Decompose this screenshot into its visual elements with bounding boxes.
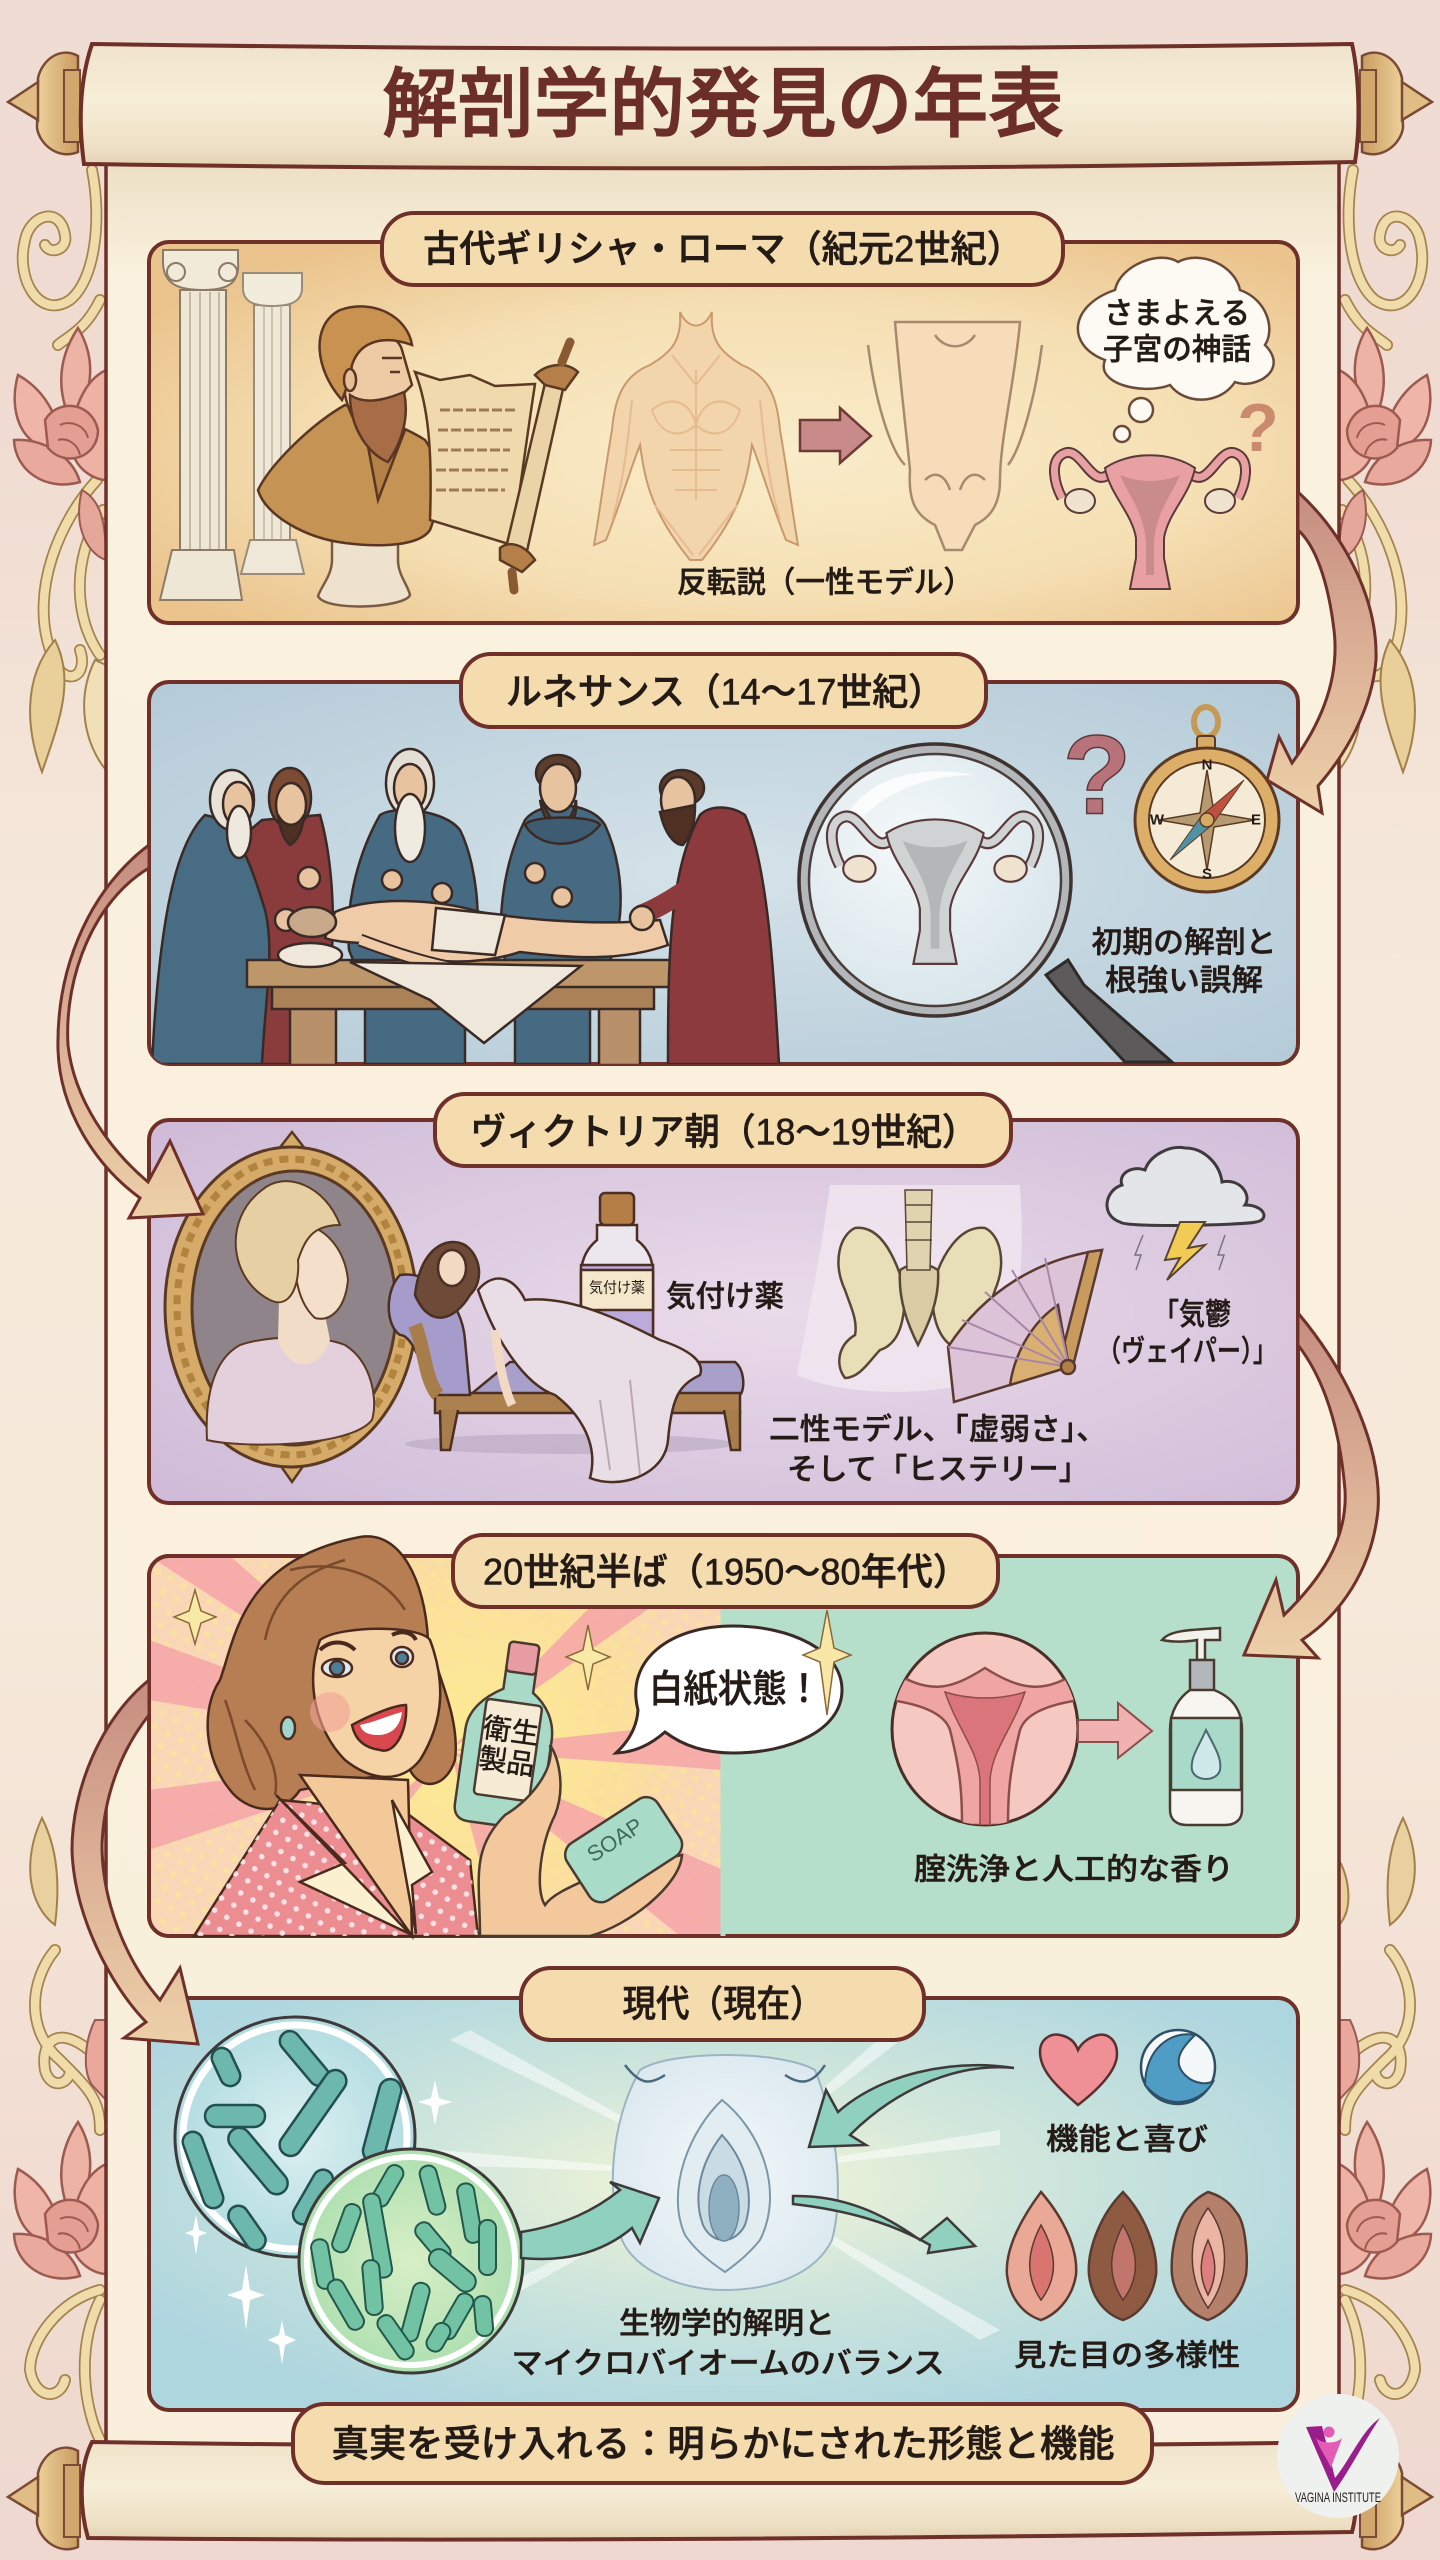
panel: Renaissance <box>149 682 1298 1065</box>
icon: uterus cross-section circle <box>890 1633 1080 1825</box>
text: vapours <box>1097 1298 1277 1368</box>
icon: soap bar with hand: SOAP <box>582 1813 647 1867</box>
figure: centre blue robe scholar <box>348 749 478 1064</box>
icon: pink uterus <box>1054 452 1246 589</box>
panel: mid twentieth century <box>149 1536 1298 1936</box>
text: biological elucidation: マイクロバイオームのバランス <box>512 2348 944 2380</box>
pill heading: Renaissance: ルネサンス（14～17世紀） <box>506 672 944 712</box>
glow rays <box>440 2020 1000 2340</box>
callout: blank slate speech bubble <box>616 1626 842 1753</box>
text: wandering womb myth: 子宮の神話 <box>1103 334 1251 366</box>
text: two-sex model <box>769 1414 1107 1486</box>
text: bottle label: 気付け薬 <box>589 1280 645 1296</box>
arrow: transformation <box>800 408 871 463</box>
text: two-sex model: 二性モデル、「虚弱さ」、 <box>769 1414 1107 1446</box>
panel: modern day <box>149 1998 1298 2410</box>
text: early dissection: 根強い誤解 <box>1105 964 1263 998</box>
icon: parchment and scroll rod <box>415 342 578 590</box>
bottom scroll roller <box>8 2442 1432 2549</box>
text: diversity of appearance: 見た目の多様性 <box>1014 2340 1240 2372</box>
right lower floral ornament <box>1339 1818 1431 2440</box>
icon: bust pedestal <box>318 540 410 606</box>
top scroll roller <box>8 44 1432 168</box>
icon: pump bottle <box>1162 1628 1242 1825</box>
callout: wandering womb thought bubble <box>1078 258 1274 442</box>
pop art ray background <box>149 1556 723 1936</box>
logo: Vagina Institute: VAGINA INSTITUTE <box>1295 2489 1381 2505</box>
text: early dissection <box>1092 926 1276 998</box>
text: early dissection: 初期の解剖と <box>1092 926 1276 960</box>
icon: compass: W <box>1150 812 1165 828</box>
pill heading: modern day: 現代（現在） <box>622 1984 824 2024</box>
panel: ancient Greece and Rome <box>149 242 1298 623</box>
icon: sparkle <box>566 1625 610 1690</box>
icon: compass: N <box>1202 756 1212 774</box>
left lower floral ornament <box>14 1818 106 2440</box>
arrow: anatomy to diversity <box>793 2196 975 2253</box>
figure: red robe anatomist <box>630 770 779 1064</box>
text: one-sex model: 反転説（一性モデル） <box>677 566 973 600</box>
pill heading: Victorian <box>435 1094 1011 1166</box>
text: douching and artificial scent: 腟洗浄と人工的な香り <box>914 1854 1234 1886</box>
icon: soap bar with hand <box>479 1745 687 1936</box>
pill: conclusion <box>293 2404 1152 2483</box>
arrow: function into anatomy <box>809 2065 1014 2147</box>
arrow: ancient to Renaissance <box>1267 492 1376 813</box>
icon: green petri circle with bacteria <box>299 2149 523 2373</box>
parchment scroll body <box>106 160 1339 2460</box>
icon: question mark: ? <box>1063 712 1131 838</box>
icon: hygiene product bottle <box>453 1637 565 1831</box>
icon: folding fan <box>948 1250 1102 1402</box>
text: smelling salts: 気付け薬 <box>666 1280 784 1314</box>
text: wandering womb myth: さまよえる <box>1104 298 1250 330</box>
text: hygiene product label <box>477 1712 541 1781</box>
icon: question mark: ? <box>1237 390 1279 466</box>
arrow: Victorian to mid century <box>1244 1313 1378 1658</box>
logo: Vagina Institute <box>1277 2394 1399 2518</box>
figure: right blue robe scholar <box>501 755 621 1064</box>
text: vapours: 「気鬱 <box>1153 1298 1231 1332</box>
icon: sparkles <box>185 2080 452 2365</box>
figure: red robe scholar behind <box>238 768 333 1064</box>
icon: compass <box>1135 707 1279 892</box>
text: hygiene product label: 製品 <box>477 1743 537 1781</box>
arrow: mid century to modern <box>72 1680 198 2044</box>
table <box>247 960 687 1065</box>
figure: left blue robe scholar <box>152 770 297 1064</box>
callout: blank slate speech bubble: 白紙状態！ <box>649 1669 821 1711</box>
icon: short column <box>241 273 304 574</box>
icon: diversity shapes <box>1007 2192 1247 2320</box>
right upper floral ornament <box>1339 170 1431 772</box>
icon: scholar bust <box>258 306 438 545</box>
text: vapours: （ヴェイパー）」 <box>1097 1336 1277 1368</box>
icon: translucent anatomy <box>613 2055 838 2290</box>
pill heading: mid twentieth century: 20世紀半ば（1950～80年代） <box>483 1552 969 1592</box>
sheet <box>350 962 581 1043</box>
figure: dissected body <box>278 901 668 972</box>
pill heading: Victorian: ヴィクトリア朝（18～19世紀） <box>470 1112 978 1152</box>
icon: sparkle <box>174 1590 216 1644</box>
figure: reclining woman <box>415 1242 701 1482</box>
icon: magnifying glass <box>799 744 1172 1062</box>
arrow: to artificial fragrance <box>1078 1703 1152 1758</box>
icon: fainting couch <box>389 1274 743 1454</box>
icon: pelvis with veil <box>797 1185 1022 1392</box>
icon: large sparkle <box>803 1610 851 1715</box>
pill heading: modern day <box>521 1968 924 2040</box>
pill heading: mid twentieth century <box>453 1535 998 1607</box>
icon: blue petri circle with bacteria <box>175 2017 415 2257</box>
icon: tall column <box>160 250 242 600</box>
text: wandering womb myth <box>1103 298 1251 366</box>
arrow: Renaissance to Victorian <box>58 845 203 1218</box>
text: biological elucidation <box>512 2308 944 2380</box>
left upper floral ornament <box>14 170 106 772</box>
icon: smelling salts bottle <box>581 1193 653 1337</box>
pill heading: ancient: 古代ギリシャ・ローマ（紀元2世紀） <box>423 228 1023 270</box>
text: function and pleasure: 機能と喜び <box>1046 2124 1208 2156</box>
figure: smiling 1950s woman <box>194 1536 478 1936</box>
icon: storm cloud <box>1107 1147 1264 1280</box>
icon: portrait in gold frame <box>165 1132 417 1482</box>
pill heading: Renaissance <box>461 654 986 727</box>
icon: compass: S <box>1202 866 1212 882</box>
text: two-sex model: そして「ヒステリー」 <box>787 1454 1089 1486</box>
icon: heart <box>1040 2035 1117 2105</box>
text: biological elucidation: 生物学的解明と <box>619 2308 835 2340</box>
pill: conclusion: 真実を受け入れる：明らかにされた形態と機能 <box>332 2424 1114 2464</box>
arrow: microbiome to anatomy <box>521 2182 659 2259</box>
pill heading: ancient <box>382 213 1063 285</box>
icon: wave <box>1141 2030 1215 2104</box>
icon: compass: E <box>1251 812 1261 828</box>
title: 解剖学的発見の年表 <box>382 62 1064 148</box>
panel: Victorian <box>149 1120 1298 1503</box>
text: hygiene product label: 衛生 <box>481 1712 541 1750</box>
icon: inverted anatomy figure <box>868 322 1042 550</box>
icon: anatomical torso <box>594 312 798 560</box>
